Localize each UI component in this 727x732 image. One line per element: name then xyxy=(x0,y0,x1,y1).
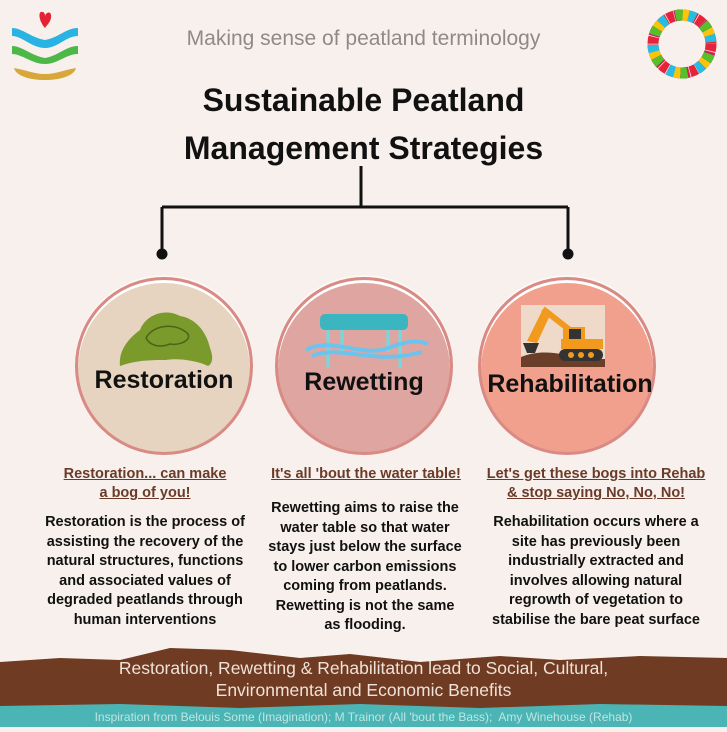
text: restoration xyxy=(45,514,245,628)
title: Management Strategies xyxy=(184,130,543,166)
heading: restoration: Restoration... can make xyxy=(64,466,226,482)
icon: water table xyxy=(305,314,429,368)
logo: peatland xyxy=(12,12,78,80)
text: rehabilitation: industrially extracted and xyxy=(508,553,684,569)
heading: restoration xyxy=(64,466,226,501)
text: restoration: and associated values of xyxy=(59,572,231,588)
text: restoration: degraded peatlands through xyxy=(47,592,243,608)
text: rehabilitation: Rehabilitation occurs where a xyxy=(493,514,699,530)
credits: Inspiration from Belouis Some (Imagination); M Trainor (All 'bout the Bass); Amy Winehouse (Rehab) xyxy=(95,710,632,724)
heading: restoration: a bog of you! xyxy=(99,485,190,501)
text: restoration: Restoration is the process of xyxy=(45,514,245,530)
text: rehabilitation: regrowth of vegetation to xyxy=(509,592,683,608)
heading: rehabilitation xyxy=(486,466,706,501)
icon: excavator xyxy=(521,305,605,367)
text: rewetting: as flooding. xyxy=(324,617,406,633)
text: rewetting: Rewetting aims to raise the xyxy=(271,500,459,516)
connector tree xyxy=(156,166,574,260)
footer message xyxy=(119,658,608,700)
text: rewetting: water table so that water xyxy=(280,520,450,536)
text: rehabilitation: stabilise the bare peat surface xyxy=(492,612,700,628)
text: rewetting xyxy=(268,500,462,633)
text: rehabilitation: site has previously been xyxy=(512,534,680,550)
heading: rehabilitation: & stop saying No, No, No! xyxy=(507,485,685,501)
panel: rewetting circle xyxy=(275,277,453,455)
text: rewetting: to lower carbon emissions xyxy=(274,558,456,574)
label: Rehabilitation: Rehabilitation xyxy=(487,370,653,398)
title: Sustainable Peatland xyxy=(203,82,524,118)
footer message: Environmental and Economic Benefits xyxy=(216,680,511,700)
text: rehabilitation: involves allowing natural xyxy=(510,572,682,588)
footer message: Restoration, Rewetting & Rehabilitation lead to Social, Cultural, xyxy=(119,658,608,678)
panel: rehabilitation circle xyxy=(478,277,656,455)
footer bands xyxy=(0,648,727,727)
logo: SDG wheel xyxy=(648,10,716,78)
subtitle: Making sense of peatland terminology xyxy=(187,27,540,50)
heading: rewetting: It's all 'bout the water table! xyxy=(271,466,461,482)
text: rewetting: stays just below the surface xyxy=(268,539,462,555)
text: restoration: assisting the recovery of the xyxy=(47,534,243,550)
text: rewetting: Rewetting is not the same xyxy=(276,598,454,614)
text: restoration: natural structures, functions xyxy=(47,553,243,569)
text: restoration: human interventions xyxy=(74,612,216,628)
panel: restoration circle xyxy=(75,277,253,455)
heading: rehabilitation: Let's get these bogs into Rehab xyxy=(487,466,705,482)
label: Restoration: Restoration xyxy=(95,366,233,394)
text: rehabilitation xyxy=(492,514,700,628)
icon: moss xyxy=(120,312,212,366)
text: rewetting: coming from peatlands. xyxy=(283,578,447,594)
label: Rewetting: Rewetting xyxy=(304,368,424,396)
title xyxy=(184,82,543,166)
